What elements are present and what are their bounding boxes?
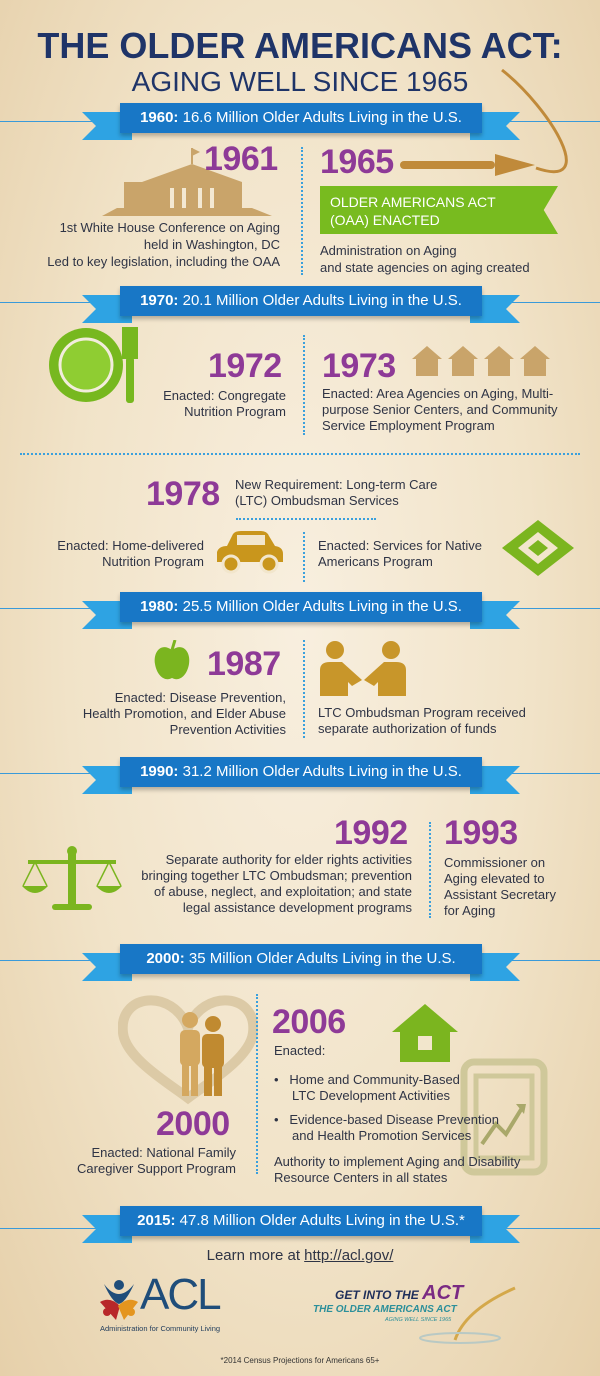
icon: native pattern xyxy=(502,520,574,576)
text: Service Employment Program xyxy=(322,418,495,433)
text: Authority to implement Aging and Disability xyxy=(274,1154,520,1169)
text: and Health Promotion Services xyxy=(292,1128,471,1143)
text: purpose Senior Centers, and Community xyxy=(322,402,558,417)
text: Enacted: xyxy=(274,1043,325,1058)
text: Enacted: Services for Native xyxy=(318,538,482,553)
icon: scales xyxy=(22,846,122,910)
text: Nutrition Program xyxy=(184,404,286,419)
logo: ACL: ACL xyxy=(140,1270,220,1319)
banner 1990 xyxy=(82,757,520,794)
text: • Evidence-based Disease Prevention xyxy=(274,1112,499,1127)
logo: get into the act: THE OLDER AMERICANS ACT xyxy=(313,1304,457,1315)
banner 1970: 1970: 20.1 Million Older Adults Living in the U.S. xyxy=(140,292,462,309)
banner 2015: 2015: 47.8 Million Older Adults Living in the U.S.* xyxy=(137,1212,465,1229)
text: Health Promotion, and Elder Abuse xyxy=(83,706,286,721)
title: AGING WELL SINCE 1965 xyxy=(132,66,468,97)
icon: heart with couple xyxy=(118,995,258,1104)
icon: houses xyxy=(412,346,550,376)
text: Nutrition Program xyxy=(102,554,204,569)
text: Resource Centers in all states xyxy=(274,1170,447,1185)
banner 1980: 1980: 25.5 Million Older Adults Living in the U.S. xyxy=(140,598,462,615)
logo: ACL xyxy=(100,1270,220,1333)
icon: apple xyxy=(154,640,190,680)
text 1961 xyxy=(47,220,280,269)
1965: 1965 xyxy=(320,143,394,181)
icon: handshake xyxy=(320,641,406,696)
1972: 1972 xyxy=(208,347,282,385)
text: bringing together LTC Ombudsman; prevention xyxy=(141,868,412,883)
text: • Home and Community-Based xyxy=(274,1072,460,1087)
text 1965: Administration on Aging xyxy=(320,243,457,258)
text: for Aging xyxy=(444,903,495,918)
text: Enacted: National Family xyxy=(91,1145,236,1160)
banner 1990: 1990: 31.2 Million Older Adults Living in the U.S. xyxy=(140,763,462,780)
icon: house green xyxy=(392,1004,458,1062)
1961: 1961 xyxy=(204,140,278,178)
logo: ACL: Administration for Community Living xyxy=(100,1324,220,1333)
text: LTC Development Activities xyxy=(292,1088,450,1103)
text: New Requirement: Long-term Care xyxy=(235,477,437,492)
text: Caregiver Support Program xyxy=(77,1161,236,1176)
text: LTC Ombudsman Program received xyxy=(318,705,526,720)
logo: get into the act: GET INTO THE ACT xyxy=(335,1282,463,1304)
text 1961: held in Washington, DC xyxy=(144,237,280,252)
2000: 2000 xyxy=(156,1105,230,1143)
title: THE OLDER AMERICANS ACT: xyxy=(37,25,563,66)
icon: white house xyxy=(102,148,272,216)
text: Assistant Secretary xyxy=(444,887,556,902)
text 1961: 1st White House Conference on Aging xyxy=(60,220,280,235)
text: Enacted: Home-delivered xyxy=(57,538,204,553)
1993: 1993 xyxy=(444,814,518,852)
text: Commissioner on xyxy=(444,855,545,870)
banner 2015 xyxy=(82,1206,520,1243)
icon: car xyxy=(217,531,283,574)
text: legal assistance development programs xyxy=(183,900,412,915)
1973: 1973 xyxy=(322,347,396,385)
footnote: *2014 Census Projections for Americans 65+ xyxy=(220,1356,379,1365)
text 1965 xyxy=(320,243,530,275)
title xyxy=(37,25,563,97)
green banner OAA xyxy=(320,186,558,234)
text: of abuse, neglect, and exploitation; and state xyxy=(154,884,412,899)
banner 1960 xyxy=(82,103,520,140)
logo: get into the act: AGING WELL SINCE 1965 xyxy=(385,1317,451,1323)
text: Americans Program xyxy=(318,554,433,569)
text 1961: Led to key legislation, including the OAA xyxy=(47,254,280,269)
text: Enacted: Congregate xyxy=(163,388,286,403)
banner 2000: 2000: 35 Million Older Adults Living in the U.S. xyxy=(146,950,456,967)
icon: pen xyxy=(400,68,568,176)
green banner OAA: OLDER AMERICANS ACT xyxy=(330,194,496,210)
icon: plate xyxy=(49,327,138,403)
icon: tablet chart xyxy=(460,1058,548,1176)
green banner OAA: (OAA) ENACTED xyxy=(330,212,440,228)
banner 2000 xyxy=(82,944,520,981)
text: Enacted: Disease Prevention, xyxy=(115,690,286,705)
text 1965: and state agencies on aging created xyxy=(320,260,530,275)
text: separate authorization of funds xyxy=(318,721,497,736)
banner 1980 xyxy=(82,592,520,629)
1978: 1978 xyxy=(146,475,220,513)
text: Prevention Activities xyxy=(170,722,286,737)
learn more: Learn more at http://acl.gov/ xyxy=(207,1247,393,1264)
1992: 1992 xyxy=(334,814,408,852)
banner 1960: 1960: 16.6 Million Older Adults Living in the U.S. xyxy=(140,109,462,126)
text: Aging elevated to xyxy=(444,871,544,886)
text: (LTC) Ombudsman Services xyxy=(235,493,399,508)
text: Separate authority for elder rights activities xyxy=(166,852,412,867)
banner 1970 xyxy=(82,286,520,323)
2006: 2006 xyxy=(272,1003,346,1041)
1987: 1987 xyxy=(207,645,281,683)
logo: get into the act xyxy=(313,1282,516,1344)
text: Enacted: Area Agencies on Aging, Multi- xyxy=(322,386,553,401)
